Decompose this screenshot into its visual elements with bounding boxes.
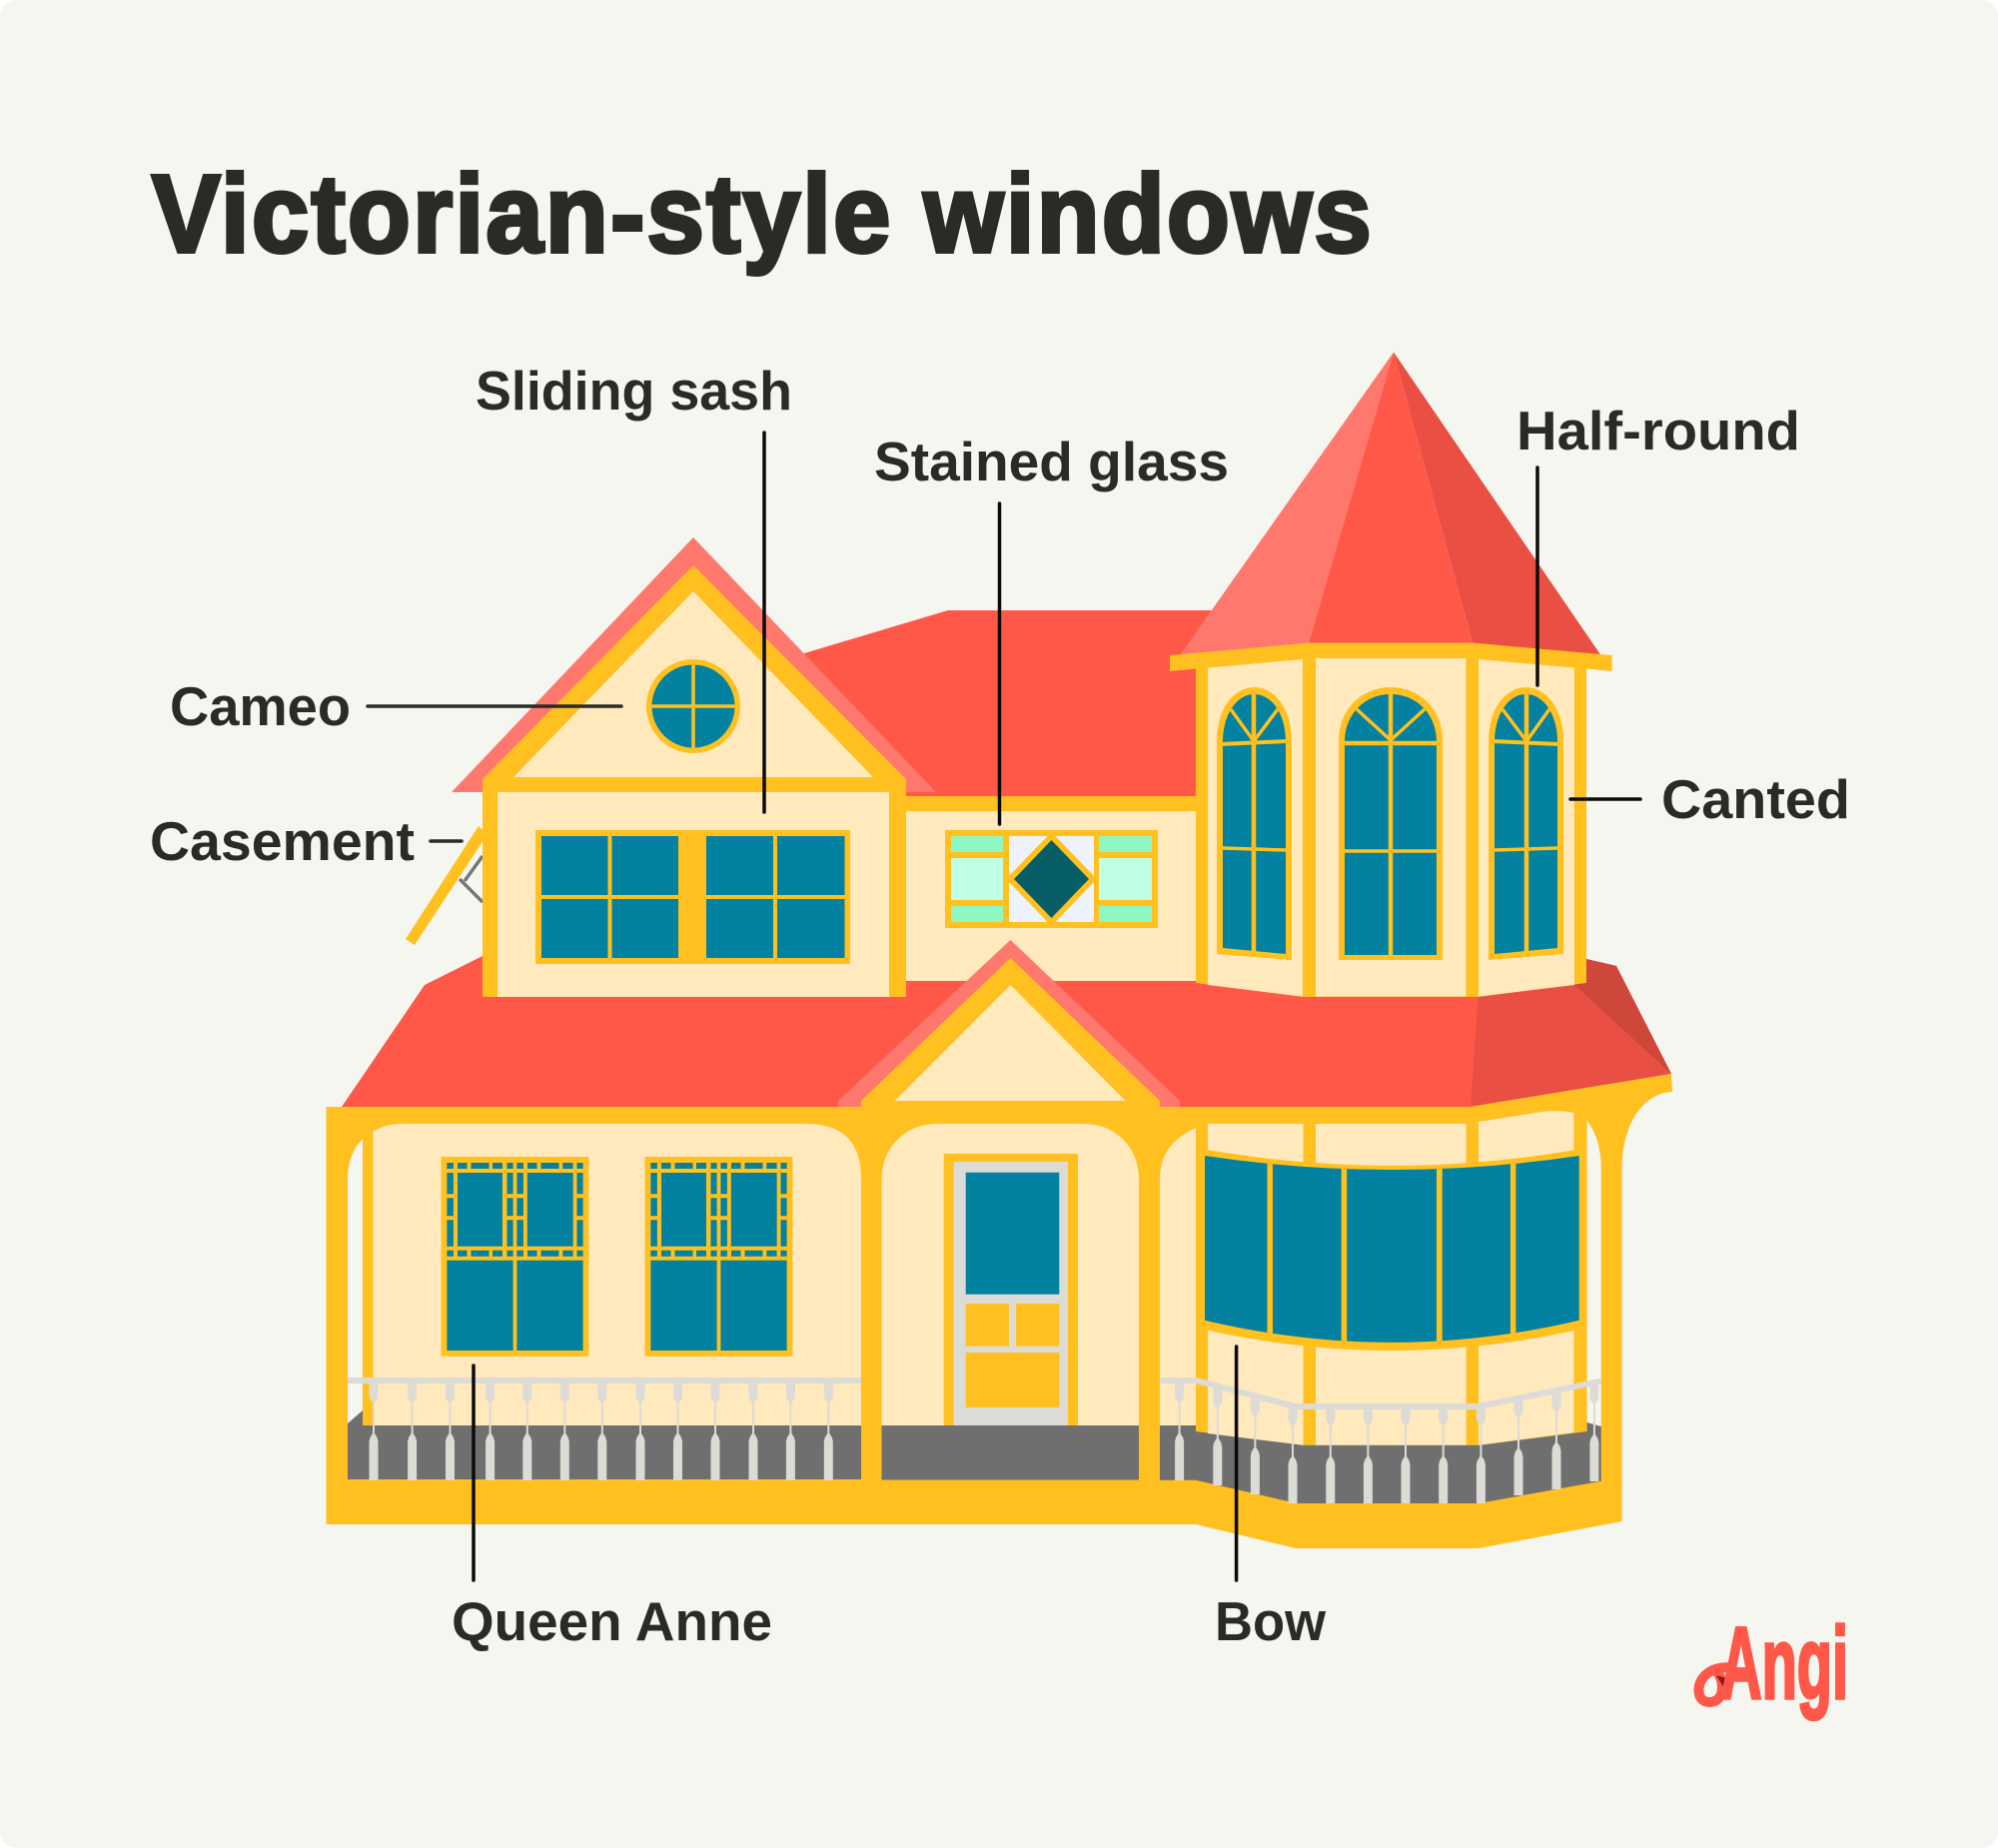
Queen Anne window left — [442, 1157, 588, 1357]
right porch walls — [1160, 1111, 1601, 1503]
front door — [944, 1154, 1078, 1425]
back upper roof — [804, 610, 1239, 799]
logo: Angi: Angi — [1720, 1606, 1848, 1720]
stained glass window — [945, 830, 1158, 928]
porch frame — [326, 1074, 1672, 1548]
sliding sash window — [535, 830, 850, 964]
half-round window center — [1339, 687, 1443, 960]
cameo window — [646, 659, 740, 753]
label: Canted: Canted — [1661, 768, 1850, 830]
casement window, open — [406, 826, 488, 945]
Queen Anne window right — [645, 1157, 792, 1357]
lower main roof — [342, 956, 1671, 1107]
half-round window left — [1217, 687, 1292, 960]
label: Queen Anne: Queen Anne — [452, 1590, 772, 1652]
middle wall section — [899, 796, 1199, 981]
label: Sliding sash: Sliding sash — [476, 360, 792, 422]
label: Half-round: Half-round — [1516, 400, 1800, 462]
right porch railing — [1160, 1381, 1601, 1503]
tower conical roof — [1180, 352, 1600, 655]
half-round window right — [1489, 687, 1563, 960]
house illustration — [326, 352, 1672, 1548]
logo: Angi — [1698, 1606, 1848, 1720]
bow window — [1196, 1148, 1587, 1364]
title: Victorian-style windows — [152, 153, 1374, 276]
label: Stained glass: Stained glass — [874, 431, 1229, 492]
left porch wall — [348, 1124, 861, 1479]
main gable dormer — [452, 537, 936, 997]
tower walls — [1170, 643, 1612, 997]
left porch railing — [348, 1378, 861, 1480]
entry wall — [881, 1124, 1139, 1480]
label: Bow: Bow — [1215, 1590, 1326, 1652]
label: Casement: Casement — [150, 810, 415, 872]
label: Cameo: Cameo — [170, 675, 351, 737]
front gable — [838, 940, 1180, 1124]
